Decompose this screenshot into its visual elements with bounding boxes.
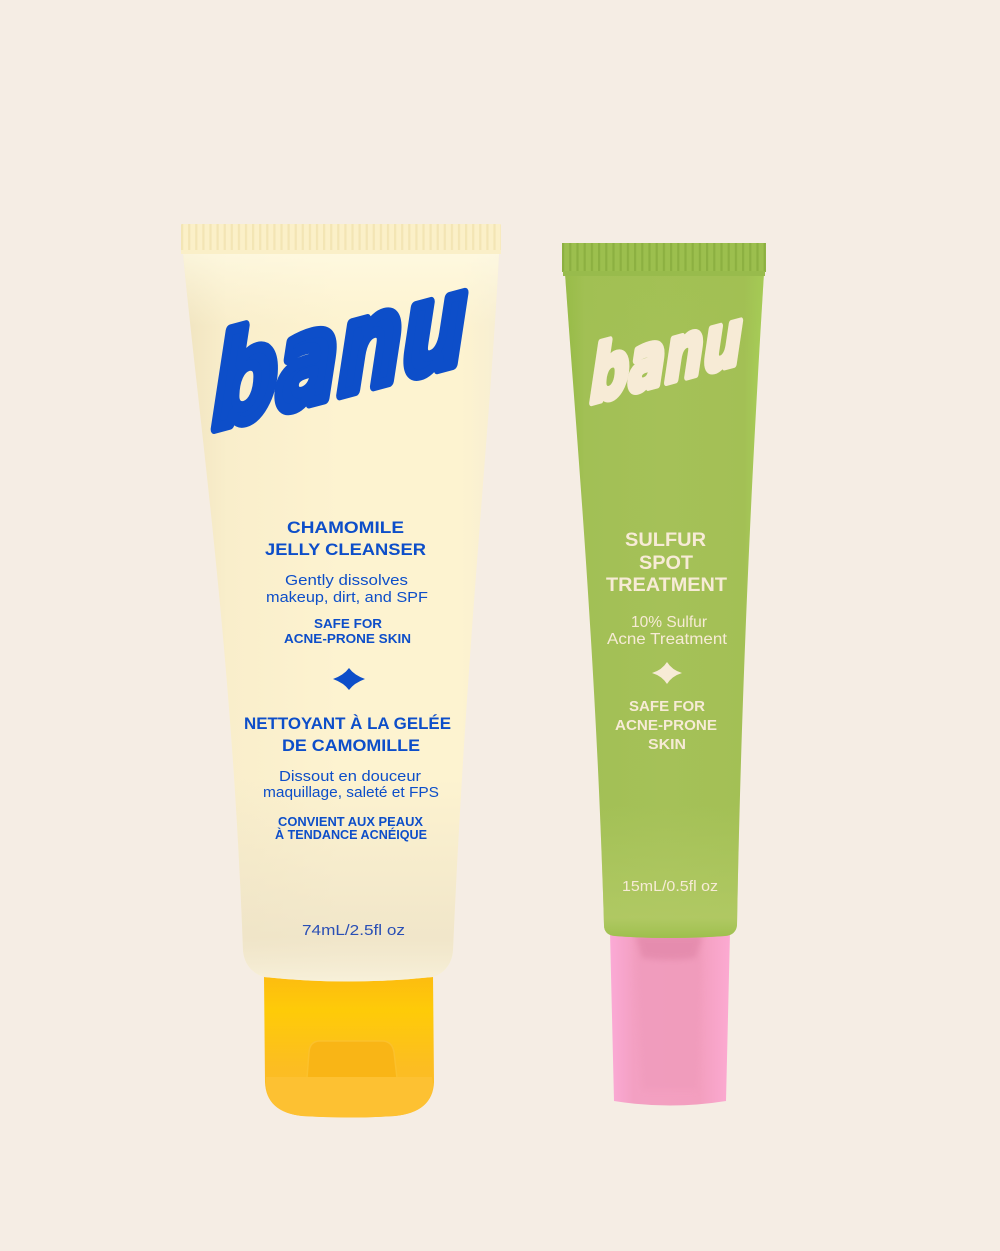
English label: JELLY CLEANSER (265, 540, 426, 559)
icon: sparkle (652, 662, 682, 684)
yellow flip cap (264, 976, 434, 1118)
French label: CONVIENT AUX PEAUX (278, 815, 424, 829)
safety claim: SAFE FOR (629, 699, 706, 715)
wordmark: banu (211, 247, 468, 459)
label (606, 530, 728, 648)
label: SPOT (639, 553, 693, 574)
English label (265, 518, 428, 646)
label: Acne Treatment (607, 631, 728, 648)
ribbed crimp (562, 243, 766, 276)
label: 10% Sulfur (631, 614, 708, 631)
English label: Gently dissolves (285, 572, 408, 589)
French label (244, 714, 451, 842)
wordmark: banu (590, 292, 743, 421)
tube body (565, 273, 764, 938)
product: chamomile jelly cleanser tube (181, 224, 501, 1118)
French label: À TENDANCE ACNÉIQUE (275, 827, 427, 842)
safety claim (615, 699, 717, 753)
French label: Dissout en douceur (279, 768, 421, 785)
icon: sparkle (333, 668, 365, 690)
ribbed crimp (181, 224, 501, 254)
volume: 15mL/0.5fl oz (622, 879, 718, 895)
French label: DE CAMOMILLE (282, 736, 420, 755)
English label: ACNE-PRONE SKIN (284, 632, 411, 646)
English label: makeup, dirt, and SPF (266, 589, 428, 606)
tube body (183, 254, 499, 982)
label: SULFUR (625, 530, 706, 551)
volume: 74mL/2.5fl oz (302, 922, 405, 939)
safety claim: SKIN (648, 737, 686, 753)
English label: SAFE FOR (314, 617, 382, 631)
French label: maquillage, saleté et FPS (263, 784, 439, 801)
product: sulfur spot treatment tube (562, 243, 766, 1106)
pink cap (610, 932, 730, 1106)
label: TREATMENT (606, 575, 727, 596)
English label: CHAMOMILE (287, 518, 404, 537)
safety claim: ACNE-PRONE (615, 718, 717, 734)
French label: NETTOYANT À LA GELÉE (244, 714, 451, 733)
